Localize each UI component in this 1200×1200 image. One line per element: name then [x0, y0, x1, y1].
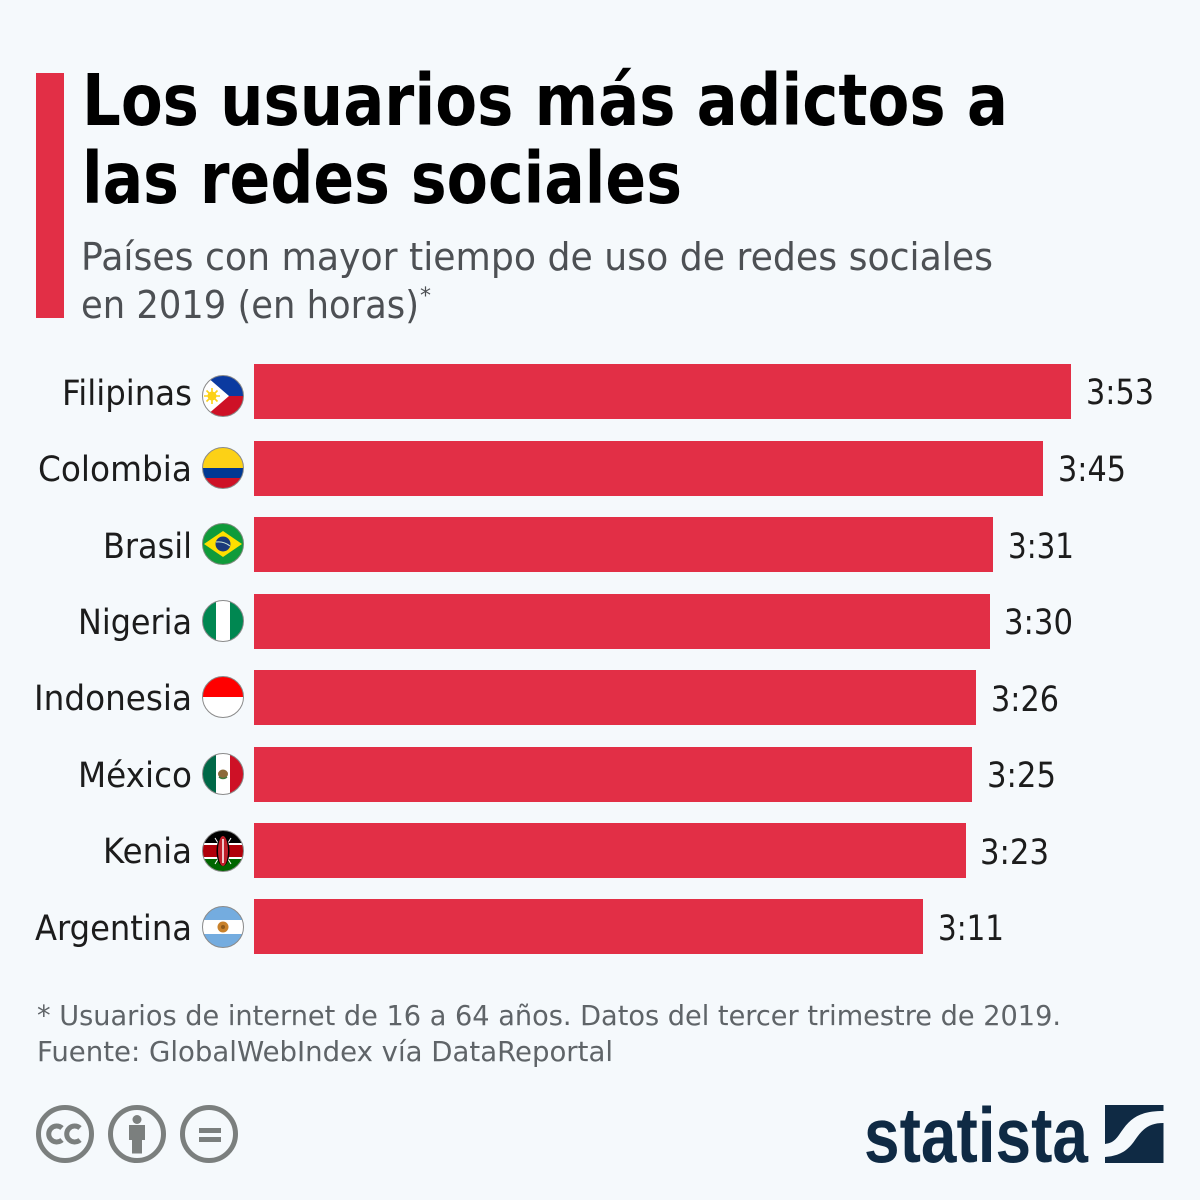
- title: las redes sociales: [82, 137, 682, 220]
- statista logo: statista: [864, 1091, 1088, 1179]
- subtitle: *: [420, 284, 431, 309]
- row: México: México: [78, 756, 192, 796]
- footnote and source: * Usuarios de internet de 16 a 64 años. Datos del tercer trimestre de 2019.: [37, 999, 1061, 1032]
- row: Nigeria: Nigeria: [78, 603, 192, 643]
- row: Filipinas: [62, 364, 1154, 422]
- subtitle: [81, 235, 993, 327]
- row: Kenia: 3:23: [980, 833, 1049, 873]
- bar chart: [34, 364, 1154, 954]
- row: Kenia: [103, 823, 1049, 878]
- row: Colombia: Colombia: [38, 450, 192, 490]
- title: [82, 59, 1008, 220]
- row: Colombia: 3:45: [1058, 450, 1126, 490]
- row: Nigeria: [78, 594, 1073, 649]
- icon: creative commons: [38, 1108, 92, 1160]
- icon: attribution: [110, 1108, 164, 1160]
- row: México: [78, 747, 1056, 802]
- title accent bar: [36, 73, 64, 318]
- subtitle: en 2019 (en horas): [81, 283, 419, 327]
- footnote and source: Fuente: GlobalWebIndex vía DataReportal: [37, 1035, 613, 1068]
- row: Indonesia: 3:26: [991, 680, 1059, 720]
- row: México: 3:25: [987, 756, 1056, 796]
- row: Colombia: [38, 441, 1126, 496]
- row: Filipinas: 3:53: [1086, 373, 1154, 413]
- row: Filipinas: Filipinas: [62, 374, 192, 414]
- row: Kenia: Kenia: [103, 832, 192, 872]
- row: Brasil: 3:31: [1008, 527, 1074, 567]
- icon: no derivatives: [182, 1108, 236, 1160]
- row: Nigeria: 3:30: [1004, 603, 1073, 643]
- footnote and source: [37, 999, 1061, 1068]
- row: Argentina: 3:11: [938, 909, 1004, 949]
- row: Argentina: [35, 899, 1004, 954]
- row: Brasil: Brasil: [103, 527, 192, 567]
- row: Indonesia: Indonesia: [34, 679, 192, 719]
- row: Indonesia: [34, 670, 1059, 725]
- row: Argentina: Argentina: [35, 909, 192, 949]
- row: Brasil: [103, 517, 1074, 572]
- subtitle: Países con mayor tiempo de uso de redes sociales: [81, 235, 993, 279]
- title: Los usuarios más adictos a: [82, 59, 1008, 142]
